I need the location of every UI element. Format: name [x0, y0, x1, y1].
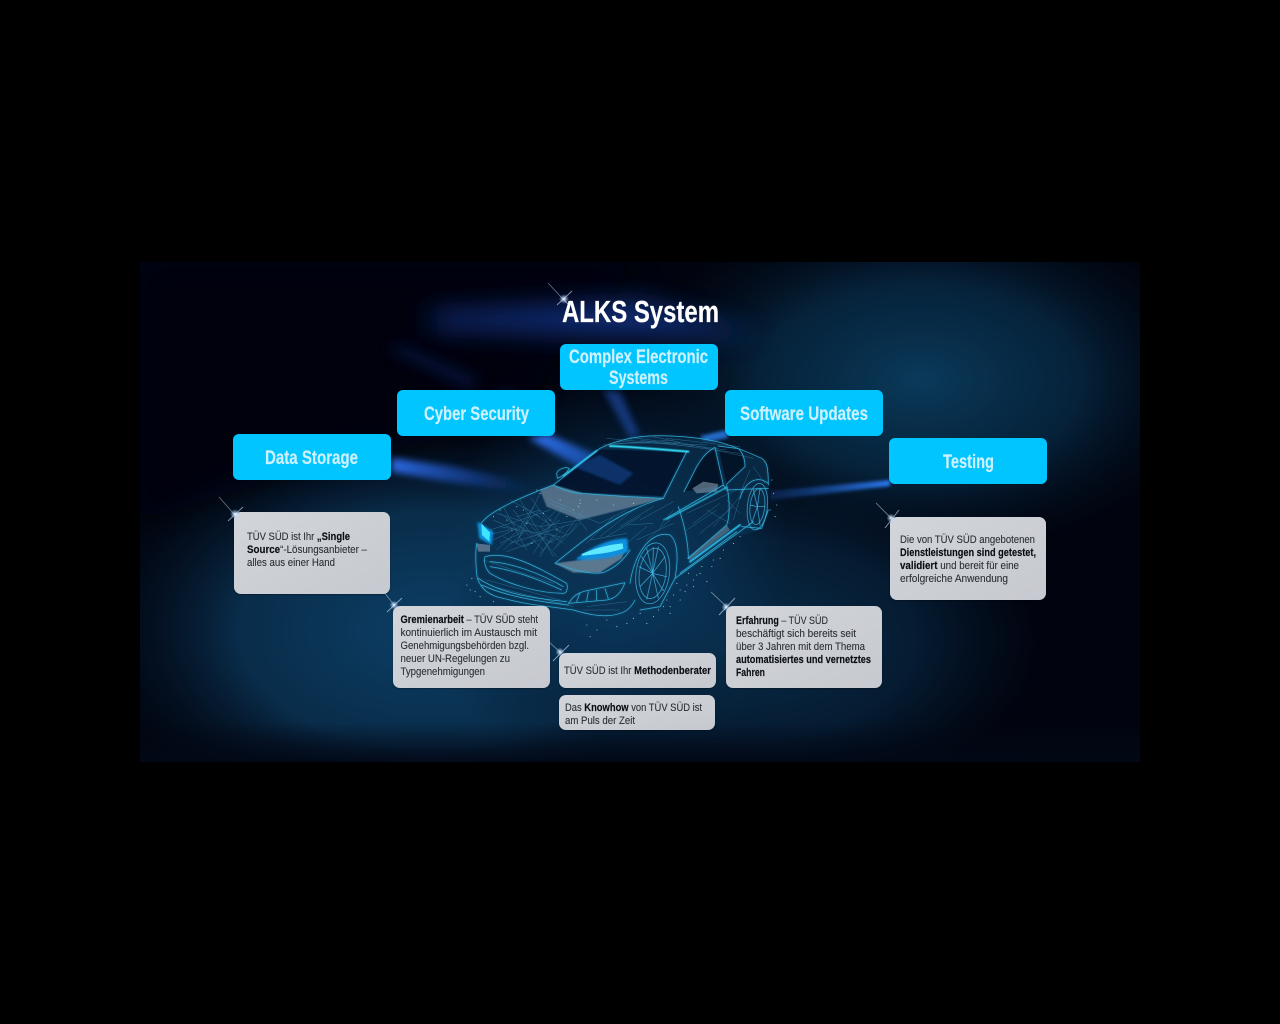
- icon: sparkle Gremienarbeit: [384, 592, 402, 612]
- callout: Single Source: alles aus einer Hand: [247, 557, 335, 569]
- callout: Gremienarbeit: Typgenehmigungen: [400, 666, 485, 678]
- box: Testing: Testing: [943, 452, 994, 473]
- callout: Single Source: TÜV SÜD ist Ihr „Single: [247, 531, 350, 543]
- hood highlight: [540, 485, 663, 520]
- callout: Erfahrung: beschäftigt sich bereits seit: [736, 628, 857, 640]
- car body fill: [476, 436, 768, 617]
- callout: Testing description: [890, 517, 1046, 600]
- callout: Single Source: [234, 512, 390, 594]
- windows dark: [555, 449, 685, 496]
- box: Complex Electronic Systems: Systems: [609, 368, 668, 389]
- box: Complex Electronic Systems: Complex Electronic: [569, 347, 708, 368]
- callout: Testing description: Dienstleistungen sind getestet,: [900, 547, 1036, 559]
- box: Testing: [889, 438, 1047, 484]
- callout: Methodenberater: TÜV SÜD ist Ihr Methodenberater: [564, 665, 712, 677]
- panel: dark blue background: [140, 262, 1140, 762]
- callout: Testing description: Die von TÜV SÜD angebotenen: [900, 534, 1035, 546]
- callout: Erfahrung: automatisiertes und vernetztes: [736, 654, 871, 666]
- callout: Gremienarbeit: neuer UN-Regelungen zu: [400, 653, 510, 665]
- callout: Erfahrung: Erfahrung – TÜV SÜD: [736, 615, 828, 627]
- box: Cyber Security: Cyber Security: [424, 404, 529, 425]
- box: Complex Electronic Systems: [560, 344, 718, 390]
- mesh lines: [483, 437, 765, 610]
- callout: Knowhow: am Puls der Zeit: [565, 715, 636, 727]
- particles: [467, 430, 777, 637]
- illustration: wireframe car: [467, 430, 777, 637]
- box: Cyber Security: [397, 390, 555, 436]
- box: Software Updates: [725, 390, 883, 436]
- callout: Gremienarbeit: Gremienarbeit – TÜV SÜD steht: [400, 614, 539, 626]
- box: Data Storage: Data Storage: [265, 448, 358, 469]
- icon: sparkle Erfahrung: [711, 592, 735, 615]
- callout: Gremienarbeit: kontinuierlich im Austausch mit: [400, 627, 538, 639]
- icon: sparkle Testing: [876, 503, 899, 528]
- wheels: [632, 482, 770, 606]
- callout: Gremienarbeit: Genehmigungsbehörden bzgl.: [400, 640, 529, 652]
- callout: Erfahrung: [726, 606, 882, 688]
- icon: sparkle Methodenberater: [549, 642, 569, 661]
- callout: Gremienarbeit: [393, 606, 550, 688]
- callout: Erfahrung: über 3 Jahren mit dem Thema: [736, 641, 866, 653]
- callout: Testing description: erfolgreiche Anwendung: [900, 573, 1008, 585]
- callout: Knowhow: Das Knowhow von TÜV SÜD ist: [565, 702, 703, 714]
- callout: Testing description: validiert und bereit für eine: [900, 560, 1019, 572]
- icon: sparkle Single Source: [219, 497, 243, 521]
- title: ALKS System: [562, 294, 719, 329]
- callout: Single Source: Source“-Lösungsanbieter –: [247, 544, 368, 556]
- headlights: [477, 522, 628, 560]
- bright streaks: [563, 446, 740, 562]
- box: Software Updates: Software Updates: [740, 404, 868, 425]
- callout: Methodenberater: [559, 653, 716, 688]
- box: Data Storage: [233, 434, 391, 480]
- callout: Knowhow: [559, 695, 715, 730]
- icon: sparkle title: [548, 283, 572, 305]
- callout: Erfahrung: Fahren: [736, 667, 765, 679]
- body lines: [476, 436, 768, 616]
